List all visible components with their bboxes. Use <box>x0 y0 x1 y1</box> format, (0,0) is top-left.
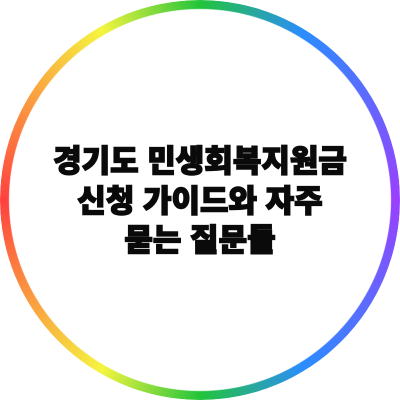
title: 경기도 민생회복지원금 <box>53 144 347 179</box>
title: 묻는 질문들 <box>124 223 276 258</box>
title: 신청 가이드와 자주 <box>77 184 323 218</box>
title <box>53 144 347 258</box>
